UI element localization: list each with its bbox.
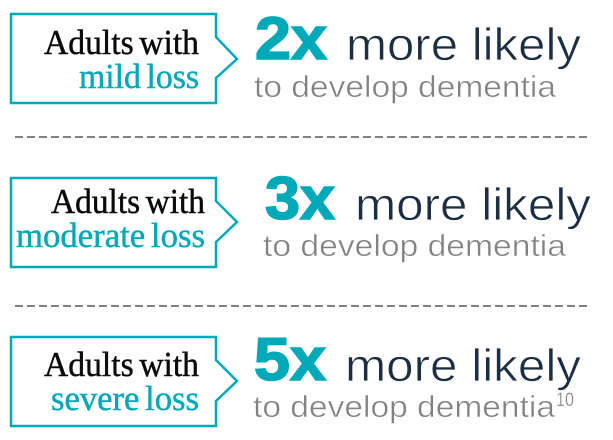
- callout: severe loss: [11, 337, 237, 426]
- stat: 2x more likely: 2x: [255, 5, 327, 72]
- callout: moderate loss: moderate loss: [16, 216, 205, 255]
- stat: 5x more likely: [253, 326, 582, 424]
- callout: moderate loss: Adults with: [51, 182, 205, 221]
- callout: mild loss: Adults with: [44, 23, 199, 62]
- stat: 2x more likely: [254, 5, 582, 104]
- row: moderate loss: [11, 165, 592, 267]
- callout: mild loss: [11, 14, 237, 103]
- stat: 3x more likely: to develop dementia: [263, 228, 567, 263]
- callout: moderate loss: [11, 178, 237, 267]
- stat: 3x more likely: 3x: [265, 165, 335, 232]
- row: severe loss: [11, 326, 582, 426]
- row: mild loss: [11, 5, 582, 104]
- callout: mild loss: mild loss: [79, 57, 199, 96]
- stat: 5x more likely: to develop dementia: [253, 389, 556, 424]
- stat: 2x more likely: to develop dementia: [254, 69, 557, 104]
- callout: severe loss: Adults with: [44, 345, 199, 384]
- callout: severe loss: severe loss: [51, 379, 199, 418]
- stat: 5x more likely: 5x: [254, 326, 326, 393]
- stat: 3x more likely: more likely: [355, 179, 592, 230]
- stat: 3x more likely: [263, 165, 592, 263]
- stat: 5x more likely: 10: [556, 390, 574, 411]
- stat: 2x more likely: more likely: [346, 19, 582, 70]
- stat: 5x more likely: more likely: [345, 340, 582, 391]
